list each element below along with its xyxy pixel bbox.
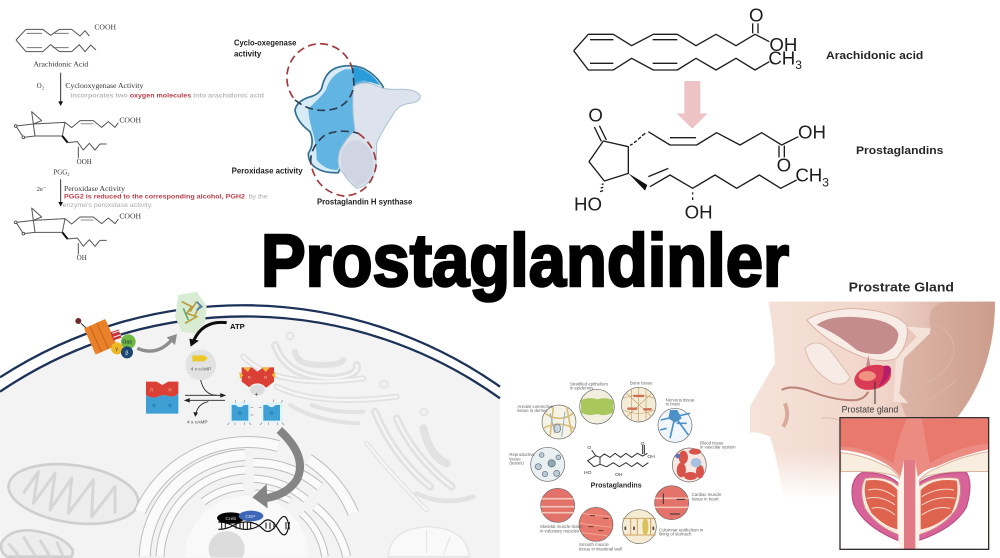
central prostaglandin molecule: OH — [647, 454, 655, 460]
transcription factors: Creb and CBP — [217, 511, 263, 524]
heading: prostrate gland: Prostrate Gland — [849, 280, 954, 294]
enzyme labels: Peroxidase activity — [232, 166, 303, 176]
tissue: smooth muscle — [579, 507, 613, 541]
arrow: ATP conversion: ATP — [230, 322, 245, 331]
title: Prostaglandinler — [261, 219, 789, 302]
molecule: PGG2: PGG₂ — [53, 168, 70, 176]
central prostaglandin molecule: O — [641, 441, 645, 447]
PKA inactive complex: R — [150, 388, 154, 393]
G protein subunits: β — [125, 350, 128, 356]
tissue captions: Columnar epithelium in — [659, 527, 704, 532]
tissue: areolar connective — [542, 405, 576, 439]
tissue: blood — [672, 448, 706, 482]
enzyme labels: activity — [234, 48, 262, 58]
tissue: nervous — [658, 408, 692, 442]
reaction step: peroxidase activity: enzyme's peroxidase activity. — [63, 202, 153, 209]
dashed circle: peroxidase site — [311, 131, 376, 196]
panel: cyclooxygenase and peroxidase reaction scheme — [14, 23, 268, 262]
organelle: mitochondrion small — [1, 530, 73, 557]
reaction step: cyclooxygenase activity: incorporates two oxygen molecules into arachidonic acid — [71, 93, 264, 100]
arrow: conversion — [677, 81, 708, 129]
molecule: arachidonic acid — [16, 23, 116, 68]
tissue captions: in epidermis — [570, 386, 593, 391]
tissue captions: Nervous tissue — [666, 397, 695, 402]
PKA regulatory subunits with cAMP: R — [264, 375, 268, 380]
panel: arachidonic acid to prostaglandins — [574, 4, 943, 223]
reaction step: peroxidase activity: 2e⁻ — [37, 186, 47, 193]
central prostaglandin molecule — [584, 441, 655, 478]
PKA inactive complex: C — [168, 403, 172, 409]
enzyme labels — [232, 37, 413, 207]
reaction arrows: PKA activation — [185, 380, 225, 425]
pelvic bone — [805, 343, 850, 384]
tissue captions: (testes) — [509, 461, 524, 466]
molecule: arachidonic acid: COOH — [94, 23, 116, 32]
body cross-section — [750, 302, 995, 500]
PKA inactive complex: C — [152, 403, 156, 409]
PKA catalytic subunits: C — [270, 411, 274, 417]
tissue captions: tissue in dermis — [517, 408, 547, 413]
molecule: PGG2: COOH — [119, 115, 141, 124]
cell membrane and cytoplasm — [0, 305, 500, 558]
DNA double helix — [218, 516, 289, 535]
cAMP bubble: 4 x cAMP — [191, 367, 211, 372]
molecule: PGH2 — [14, 208, 141, 262]
molecule: arachidonic acid: Arachidonic Acid — [33, 60, 89, 68]
PKA catalytic subunits: C — [238, 411, 242, 417]
tissue captions: Areolar connective — [517, 404, 554, 409]
PKA inactive complex: R — [168, 388, 172, 393]
leader line and label — [842, 382, 898, 414]
reaction step: cyclooxygenase activity — [37, 73, 264, 106]
molecule: arachidonic acid skeletal formula — [574, 4, 802, 72]
panel: prostate gland anatomy — [750, 280, 995, 549]
molecule: prostaglandin skeletal formula: HO — [574, 193, 602, 214]
tissue captions: Cardiac muscle — [692, 492, 722, 497]
molecule: arachidonic acid skeletal formula: 3 — [795, 58, 802, 72]
panel: cell signalling cAMP pathway — [0, 292, 500, 558]
label: arachidonic acid: Arachidonic acid — [826, 50, 923, 62]
tissue captions: Blood tissue — [700, 440, 724, 445]
tissue: columnar epithelium — [622, 510, 656, 544]
molecule: prostaglandin skeletal formula: O — [588, 104, 603, 125]
tissue captions: lining of stomach — [659, 532, 692, 537]
leader line and label: Prostate gland — [842, 404, 898, 414]
enzyme body — [295, 66, 420, 188]
central prostaglandin molecule: HO — [584, 470, 592, 476]
tissue captions: tissue in heart — [692, 496, 719, 501]
molecule: prostaglandin skeletal formula — [574, 104, 829, 223]
reaction step: cyclooxygenase activity: Cyclooxygenase Activity — [65, 81, 144, 90]
tissue: skeletal muscle — [541, 488, 575, 522]
tissue: cardiac muscle — [655, 486, 689, 520]
organelle: nucleus and endoplasmic reticulum — [140, 442, 353, 557]
tissue captions: in brain — [666, 401, 680, 406]
molecule: prostaglandin skeletal formula: OH — [685, 202, 713, 223]
transcription factors: Creb and CBP: Creb — [225, 516, 236, 522]
organelle: golgi apparatus — [243, 332, 473, 510]
molecule: arachidonic acid skeletal formula: OH — [769, 34, 797, 55]
PKA regulatory subunits with cAMP: R — [248, 375, 252, 380]
reaction step: peroxidase activity — [37, 179, 268, 209]
PKA inactive complex — [146, 382, 178, 414]
tissue captions: tissue in intestinal wall — [579, 546, 622, 551]
molecule: prostaglandin skeletal formula: OH — [798, 121, 826, 142]
central prostaglandin molecule: OH — [615, 472, 623, 478]
urethra — [782, 387, 868, 400]
inset: magnified prostate — [840, 418, 989, 549]
enzyme labels: Prostaglandin H synthase — [317, 197, 413, 207]
tissue: stratified epithelium — [580, 389, 614, 424]
PKA catalytic subunits — [227, 399, 284, 425]
reaction step: peroxidase activity: Peroxidase Activity — [64, 185, 126, 193]
reaction step: peroxidase activity: PGG2 is reduced to the corresponding alcohol, PGH2 — [64, 194, 245, 201]
molecule: PGH2: COOH — [119, 212, 141, 221]
panel: prostaglandins in tissues — [509, 380, 736, 551]
tissue captions: tissue — [509, 456, 521, 461]
label: prostaglandins: Prostaglandins — [856, 145, 943, 157]
molecule: PGG2: OOH — [77, 158, 92, 166]
PKA regulatory subunits with cAMP — [239, 367, 275, 399]
G protein subunits: Gαs — [122, 339, 133, 345]
G protein subunits: γ — [115, 346, 118, 352]
molecule: arachidonic acid skeletal formula: CH — [768, 47, 795, 68]
prostate gland organ — [852, 361, 894, 394]
molecule: PGH2: OH — [77, 254, 87, 262]
tissue captions: in voluntary muscles — [540, 528, 579, 533]
tissue: reproductive — [531, 447, 565, 481]
molecule: prostaglandin skeletal formula: 3 — [822, 175, 829, 189]
molecule: arachidonic acid skeletal formula: O — [749, 4, 764, 25]
tissue captions: Reproductive — [509, 452, 535, 457]
organelle: lysosome — [388, 527, 469, 557]
PKA regulatory subunits with cAMP: + — [255, 393, 259, 399]
molecule: prostaglandin skeletal formula: O — [777, 154, 791, 175]
bladder — [807, 308, 907, 367]
central prostaglandin molecule: O — [587, 445, 591, 451]
cAMP bubble — [185, 350, 216, 380]
tissue captions: Bone tissue — [630, 380, 653, 385]
tissue: bone — [621, 387, 656, 422]
tissue captions — [509, 380, 736, 551]
panel: prostaglandin H synthase enzyme — [232, 37, 420, 207]
arrow: G protein to adenylyl cyclase — [137, 334, 177, 351]
arrow: ATP conversion — [189, 322, 245, 347]
molecule: prostaglandin skeletal formula: CH — [795, 165, 822, 186]
reaction step: cyclooxygenase activity: O₂ — [37, 82, 45, 90]
tissue captions: Smooth muscle — [579, 542, 609, 547]
central label: Prostaglandins — [591, 481, 642, 490]
reaction arrows: PKA activation: 4 x cAMP — [187, 420, 208, 425]
transcription factors: Creb and CBP: CBP — [245, 514, 256, 520]
G protein subunits — [111, 334, 136, 358]
enzyme labels: Cyclo-oxegenase — [234, 37, 297, 47]
reaction step: peroxidase activity: by the — [249, 194, 268, 201]
tissue captions: Stratified epithelium — [570, 381, 608, 386]
tissue captions: in vascular system — [700, 445, 736, 450]
arrow: translocation to nucleus — [252, 430, 300, 508]
adenylyl cyclase — [175, 292, 207, 333]
tissue captions: Skeletal muscle tissue — [540, 524, 583, 529]
organelle: mitochondrion large — [5, 457, 142, 531]
dashed circle: cyclooxygenase site — [287, 44, 354, 110]
receptor: orange GPCR with ligand — [75, 318, 122, 355]
molecule: PGG2 — [14, 112, 141, 176]
